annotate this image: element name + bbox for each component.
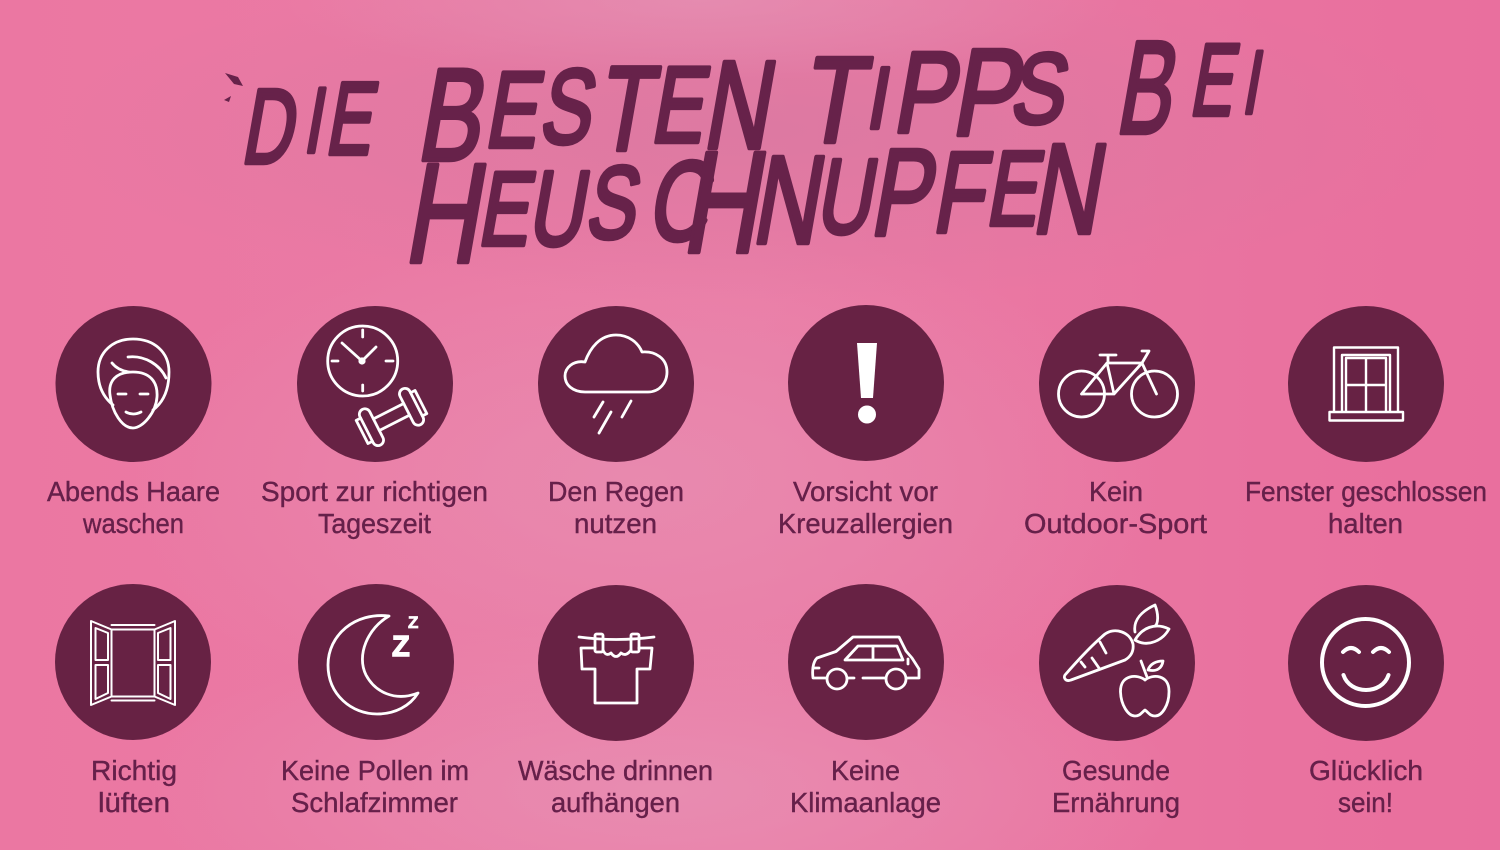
tip: Kein Outdoor-Sport: [1024, 306, 1207, 539]
title word: HEUSCHNUPFEN: E: [981, 130, 1052, 248]
title word: DIE: E: [320, 61, 386, 176]
label: lüften: [98, 787, 170, 818]
label: [91, 755, 177, 818]
icon: smiley: [1322, 619, 1409, 706]
tip: Vorsicht vor Kreuzallergien: [778, 305, 953, 539]
title word: BESTEN: B: [410, 43, 499, 188]
label: Kein: [1089, 476, 1143, 507]
title word: HEUSCHNUPFEN: H: [675, 121, 779, 283]
badge: [1288, 306, 1444, 462]
title word: HEUSCHNUPFEN: S: [580, 146, 650, 261]
title word: HEUSCHNUPFEN: F: [927, 129, 1000, 257]
badge: [1039, 585, 1195, 741]
icon: open window: [91, 621, 175, 705]
label: Fenster geschlossen: [1245, 476, 1487, 507]
label: [261, 476, 488, 539]
label: Glücklich: [1309, 755, 1423, 786]
title word: TIPPS: I: [862, 49, 898, 147]
tip: Wäsche drinnen aufhängen: [518, 585, 713, 818]
badge: [298, 584, 454, 740]
label: Richtig: [91, 755, 177, 786]
title word: BEI: B: [1109, 13, 1190, 162]
tip: Keine Pollen im Schlafzimmer: [281, 584, 469, 818]
title word: HEUSCHNUPFEN: P: [864, 125, 948, 262]
label: Tageszeit: [318, 508, 431, 539]
icon: exclamation mark: [857, 343, 877, 424]
label: [790, 755, 941, 818]
label: [47, 476, 220, 539]
title word: TIPPS: P: [887, 29, 971, 157]
label: [778, 476, 953, 539]
title word: HEUSCHNUPFEN: H: [397, 136, 498, 293]
title word: BESTEN: N: [697, 36, 786, 175]
label: halten: [1328, 508, 1403, 539]
tip: Sport zur richtigen Tageszeit: [261, 306, 488, 539]
title word: BESTEN: E: [645, 45, 718, 166]
title word: HEUSCHNUPFEN: U: [811, 138, 887, 256]
title: [224, 13, 1274, 293]
icon: closed window: [1330, 348, 1403, 420]
label: Klimaanlage: [790, 787, 941, 818]
tip: Den Regen nutzen: [538, 306, 694, 539]
title word: HEUSCHNUPFEN: N: [1026, 117, 1117, 260]
title word: DIE: I: [299, 69, 334, 172]
badge: [55, 584, 211, 740]
icon: carrot and apple: [1064, 605, 1169, 716]
tip: Keine Klimaanlage: [788, 584, 944, 818]
title word: HEUSCHNUPFEN: N: [746, 131, 835, 270]
label: Outdoor-Sport: [1024, 508, 1207, 539]
label: Vorsicht vor: [793, 476, 938, 507]
title word: TIPPS: T: [796, 32, 879, 168]
title word: HEUSCHNUPFEN: U: [523, 150, 599, 268]
label: [1245, 476, 1487, 539]
label: [548, 476, 684, 539]
label: Abends Haare: [47, 476, 220, 507]
title word: TIPPS: S: [1005, 33, 1078, 145]
title mark: [224, 73, 243, 102]
tip: Glücklich sein!: [1288, 585, 1444, 818]
label: Kreuzallergien: [778, 508, 953, 539]
label: nutzen: [574, 508, 657, 539]
title word: DIE: D: [236, 68, 307, 186]
tip: Richtig lüften: [55, 584, 211, 818]
tip: Gesunde Ernährung: [1039, 585, 1195, 818]
icon: head with towel: [98, 339, 169, 428]
title word: BESTEN: S: [534, 48, 606, 166]
label: aufhängen: [551, 787, 680, 818]
badge: [56, 306, 212, 462]
label: [518, 755, 713, 818]
badge: [1039, 306, 1195, 462]
title word: BESTEN: T: [591, 42, 667, 176]
tip: Abends Haare waschen: [47, 306, 220, 539]
label: Ernährung: [1052, 787, 1180, 818]
label: Schlafzimmer: [291, 787, 458, 818]
icon: car: [813, 637, 919, 689]
label: [1309, 755, 1423, 818]
label: waschen: [82, 508, 184, 539]
tip: Fenster geschlossen halten: [1245, 306, 1487, 539]
badge: [788, 584, 944, 740]
title word: BESTEN: E: [479, 50, 552, 171]
label: Gesunde: [1062, 755, 1170, 786]
label: [1052, 755, 1180, 818]
label: Sport zur richtigen: [261, 476, 488, 507]
label: Keine Pollen im: [281, 755, 469, 786]
badge: [538, 306, 694, 462]
icon: shirt on clothesline: [579, 634, 654, 703]
badge: [788, 305, 944, 461]
title word: TIPPS: P: [946, 23, 1036, 161]
label: Den Regen: [548, 476, 684, 507]
label: Keine: [831, 755, 900, 786]
icon: rain cloud: [565, 335, 667, 433]
badge: [1288, 585, 1444, 741]
icon: clock and dumbbell: [328, 326, 430, 450]
icon: bicycle: [1058, 351, 1178, 417]
title word: HEUSCHNUPFEN: C: [642, 139, 723, 265]
title word: BEI: E: [1185, 23, 1247, 138]
label: [281, 755, 469, 818]
badge: [297, 306, 453, 462]
title word: HEUSCHNUPFEN: E: [473, 150, 544, 268]
label: sein!: [1338, 787, 1393, 818]
label: Wäsche drinnen: [518, 755, 713, 786]
title word: BEI: I: [1238, 32, 1271, 132]
label: [1024, 476, 1207, 539]
icon: moon and sleep letters: [328, 613, 418, 714]
icon: moon and sleep letters: Z: [392, 631, 410, 663]
icon: moon and sleep letters: Z: [408, 613, 418, 632]
badge: [538, 585, 694, 741]
